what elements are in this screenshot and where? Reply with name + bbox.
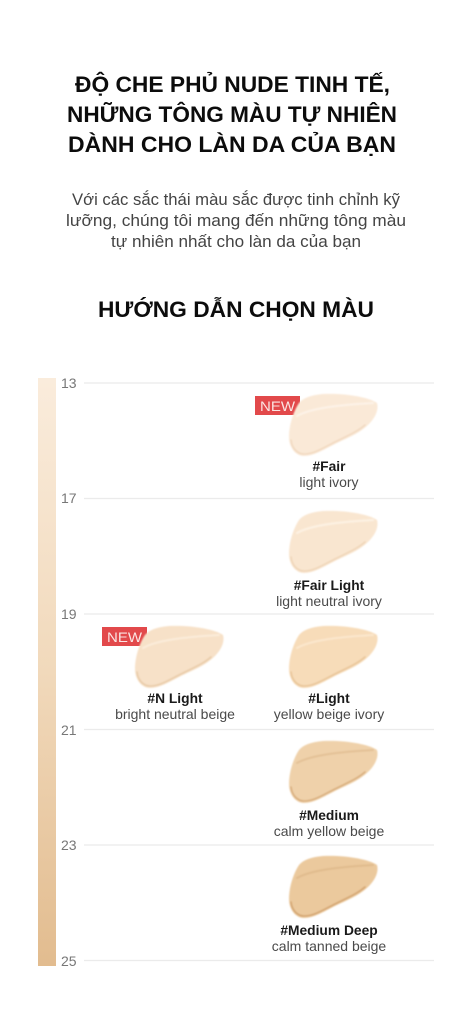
label: Medium Deep: calm tanned beige [272,938,386,954]
title [67,72,397,157]
label: Fair [299,459,359,490]
shade: N Light [102,626,235,722]
label: Medium: #Medium [299,808,359,823]
scale lines and numbers: 23 [61,837,77,853]
label: N Light: #N Light [147,691,203,706]
scale lines and numbers: 13 [61,375,77,391]
label: N Light: bright neutral beige [115,706,235,722]
swatch: Medium Deep [289,856,378,918]
shade: Light [274,626,384,722]
swatch: Fair Light [289,511,378,573]
label: N Light [115,691,235,722]
swatch: N Light [135,626,224,688]
shade: Fair Light [276,511,382,609]
label: Medium Deep [272,923,386,954]
badge: NEW: NEW [260,398,296,414]
label: Fair Light: light neutral ivory [276,593,382,609]
intro paragraph: Với các sắc thái màu sắc được tinh chỉnh kỹ [72,190,401,209]
label: Medium: calm yellow beige [274,823,384,839]
label: Light: #Light [308,691,350,706]
title: ĐỘ CHE PHỦ NUDE TINH TẾ, [75,72,390,97]
scale lines and numbers: 19 [61,606,77,622]
intro paragraph: tự nhiên nhất cho làn da của bạn [111,233,361,251]
swatch: Fair [289,394,378,456]
swatch: Light [289,626,378,688]
label: Fair Light: #Fair Light [294,578,365,593]
swatch: Medium [289,741,378,803]
intro paragraph: lưỡng, chúng tôi mang đến những tông màu [66,212,406,230]
scale lines and numbers: 21 [61,722,77,738]
scale lines and numbers [61,375,434,969]
title: NHỮNG TÔNG MÀU TỰ NHIÊN [67,102,397,127]
title: DÀNH CHO LÀN DA CỦA BẠN [68,132,396,157]
shade: Medium [274,741,384,839]
scale lines and numbers: 17 [61,490,77,506]
scale lines and numbers: 25 [61,953,77,969]
badge: NEW: NEW [107,629,143,645]
shade scale bar [38,378,56,966]
intro paragraph [66,190,406,251]
label: Fair: #Fair [313,459,346,474]
label: Medium Deep: #Medium Deep [280,923,378,938]
label: Light [274,691,384,722]
section heading: HƯỚNG DẪN CHỌN MÀU [98,296,374,322]
shade: Medium Deep [272,856,386,954]
label: Light: yellow beige ivory [274,706,384,722]
label: Fair Light [276,578,382,609]
shade: Fair [255,394,378,490]
label: Fair: light ivory [299,474,359,490]
label: Medium [274,808,384,839]
